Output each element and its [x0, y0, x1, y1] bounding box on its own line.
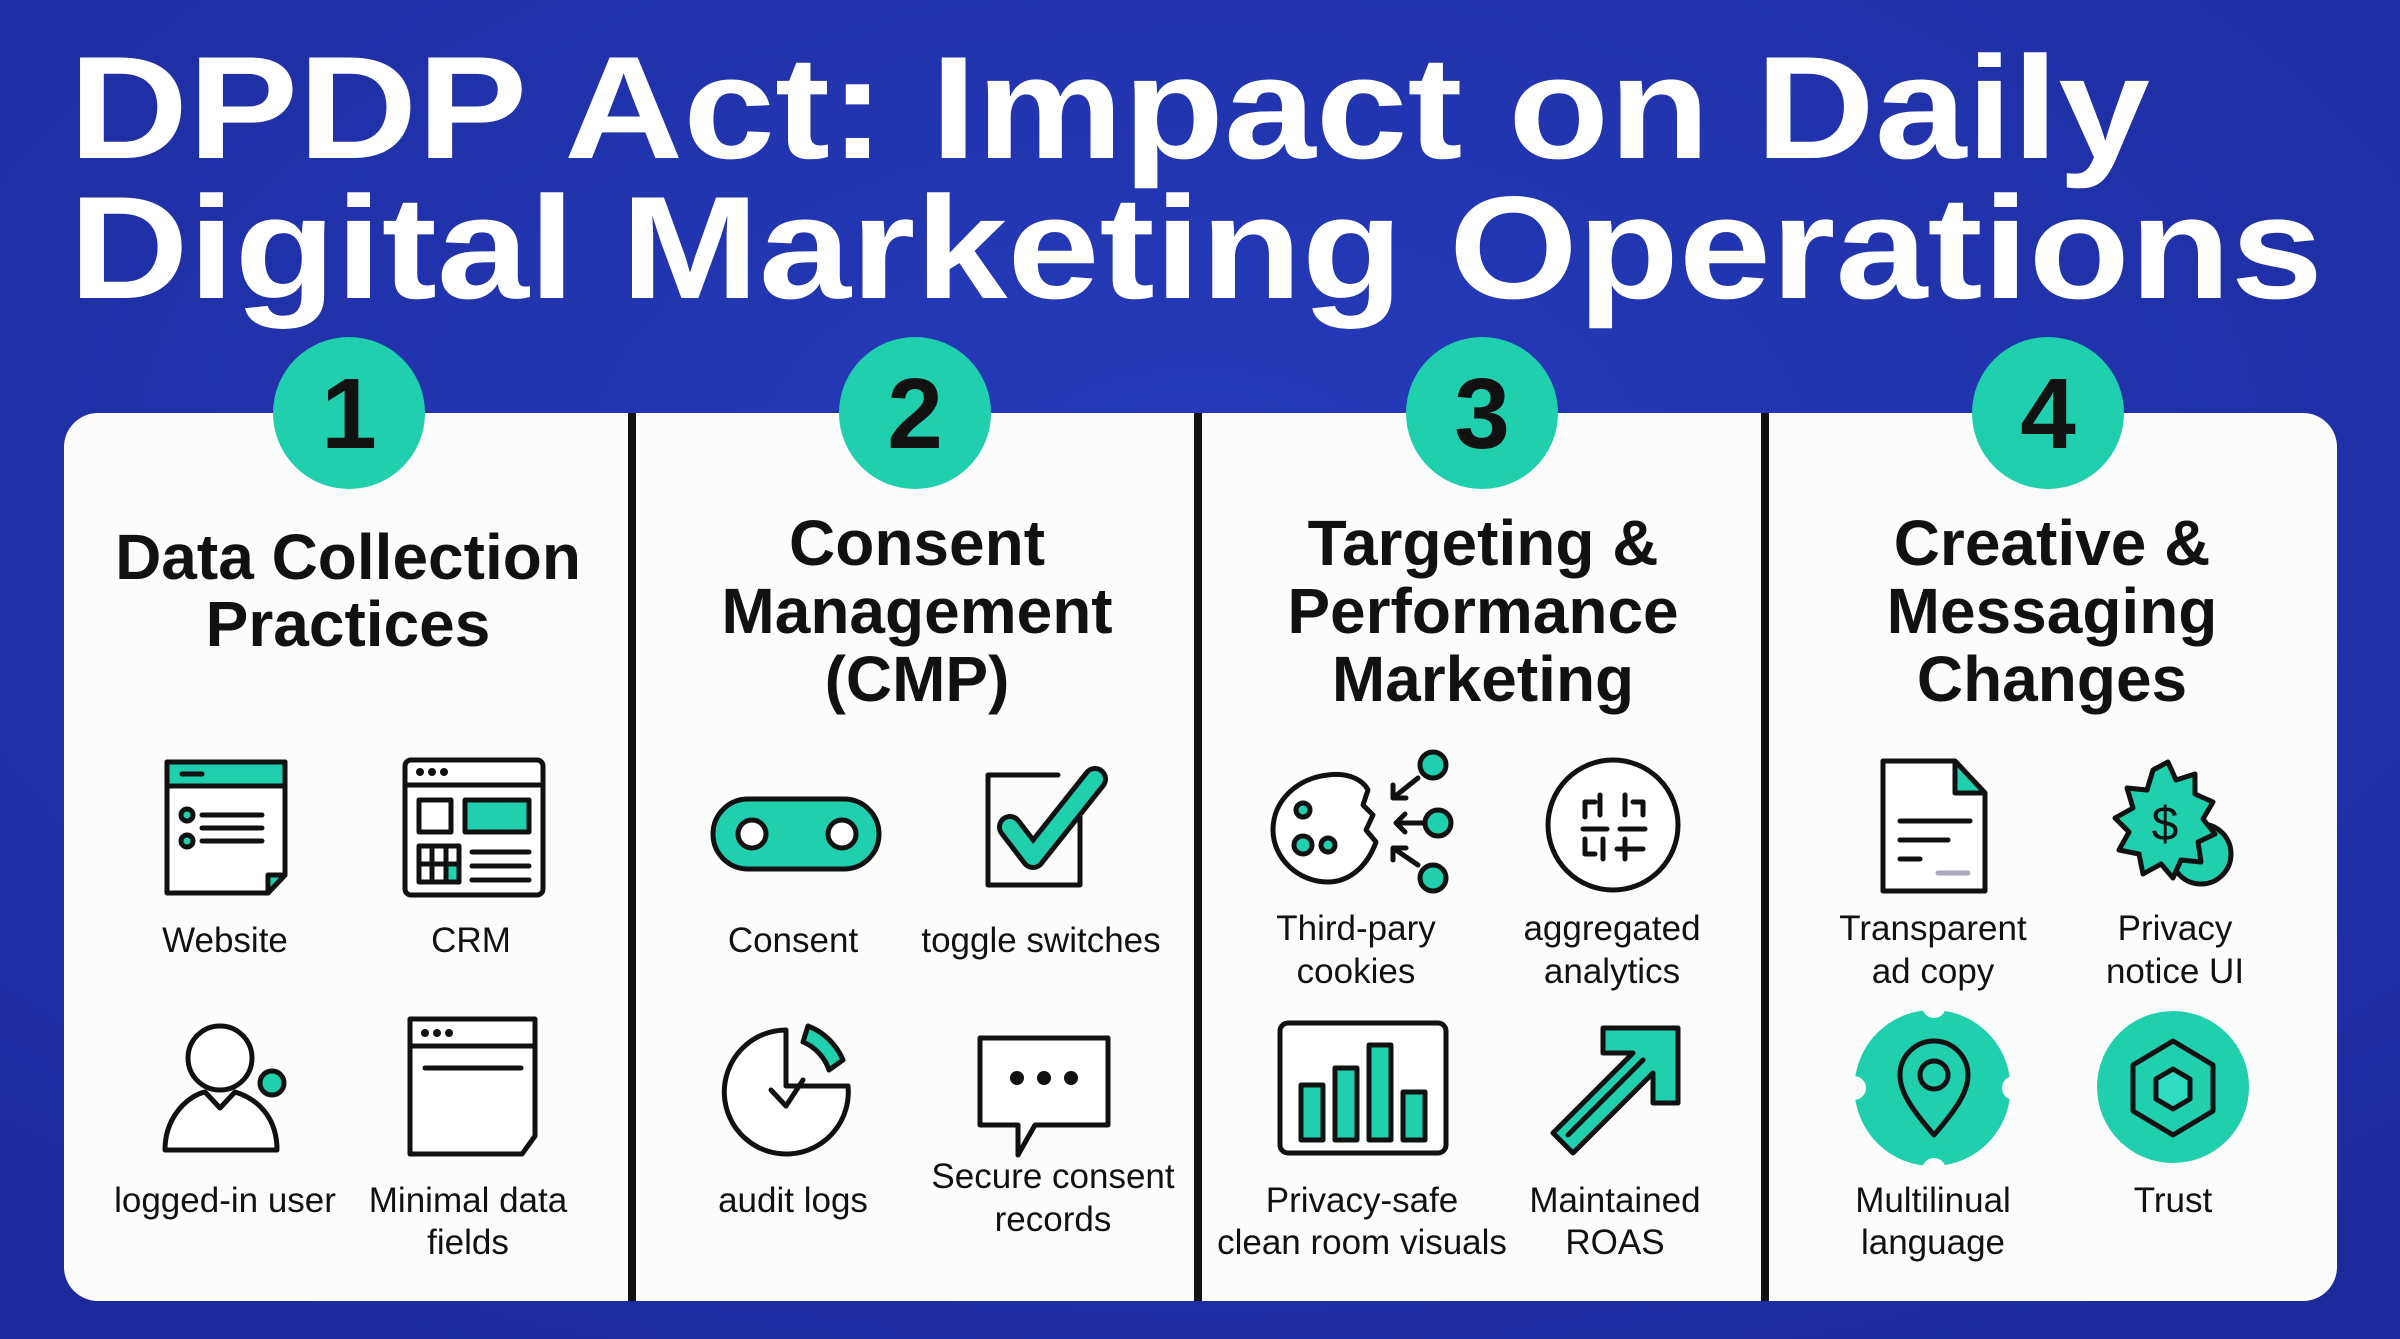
icon: privacy notice gear: [2115, 762, 2231, 884]
number badges: 1: [321, 358, 377, 470]
icon: trust: [2097, 1011, 2249, 1163]
item labels: Multilinual: [1855, 1181, 2011, 1220]
main white panel: [64, 413, 2337, 1301]
panel headings: Consent: [789, 507, 1045, 579]
item labels: records: [995, 1200, 1111, 1239]
item labels: [114, 909, 2244, 1262]
item labels: Trust: [2134, 1181, 2212, 1220]
icon: third-party cookies: [1273, 752, 1451, 891]
number badges: 2: [887, 358, 943, 470]
panel headings: Data Collection: [115, 521, 581, 593]
icon: multilingual: [1842, 994, 2026, 1182]
item labels: ROAS: [1565, 1223, 1665, 1262]
panel headings: Marketing: [1332, 643, 1634, 715]
item labels: ad copy: [1872, 952, 1995, 991]
panel headings: Changes: [1917, 643, 2187, 715]
number badges: 3: [1454, 358, 1510, 470]
icon: audit logs: [724, 1026, 848, 1154]
item labels: Maintained: [1529, 1181, 1701, 1220]
icon: aggregated analytics: [1548, 760, 1678, 890]
item labels: notice UI: [2106, 952, 2244, 991]
item labels: logged-in user: [114, 1181, 336, 1220]
icon: transparent ad copy: [1883, 761, 1985, 891]
item labels: audit logs: [718, 1181, 868, 1220]
panel headings: Creative &: [1894, 507, 2210, 579]
item labels: cookies: [1297, 952, 1415, 991]
icon: logged-in user: [165, 1026, 284, 1150]
item labels: Privacy: [2118, 909, 2233, 948]
panel headings: Practices: [206, 588, 490, 660]
title: Digital Marketing Operations: [69, 166, 2323, 329]
item labels: Website: [162, 921, 288, 960]
icon: ROAS arrow: [1553, 1028, 1678, 1153]
item labels: aggregated: [1523, 909, 1701, 948]
title: [69, 26, 2323, 329]
panel headings: Management: [721, 575, 1113, 647]
icon: secure records bubble: [980, 1038, 1108, 1155]
item labels: CRM: [431, 921, 511, 960]
item labels: Secure consent: [931, 1157, 1175, 1196]
number badges: [273, 337, 2124, 489]
item labels: Transparent: [1839, 909, 2027, 948]
item labels: language: [1861, 1223, 2005, 1262]
panel headings: Performance: [1287, 575, 1679, 647]
item labels: Minimal data: [369, 1181, 568, 1220]
icon: clean room bar chart: [1280, 1023, 1446, 1153]
icon: consent pill: [713, 799, 879, 869]
item labels: Privacy-safe: [1266, 1181, 1458, 1220]
panel headings: (CMP): [825, 643, 1009, 715]
item labels: Third-pary: [1276, 909, 1436, 948]
title: DPDP Act: Impact on Daily: [69, 26, 2150, 189]
item labels: clean room visuals: [1217, 1223, 1507, 1262]
panel headings: [115, 507, 2217, 715]
panel headings: Targeting &: [1308, 507, 1658, 579]
item labels: Consent: [728, 921, 858, 960]
number badges: 4: [2020, 358, 2076, 470]
icon: website: [167, 762, 285, 893]
icon: privacy notice gear: $: [2152, 798, 2178, 851]
icon: minimal data fields: [410, 1019, 535, 1154]
icon: toggle checkbox: [988, 775, 1095, 885]
panel headings: Messaging: [1887, 575, 2217, 647]
item labels: fields: [427, 1223, 509, 1262]
icon: CRM: [405, 760, 543, 895]
item labels: toggle switches: [921, 921, 1161, 960]
item labels: analytics: [1544, 952, 1680, 991]
